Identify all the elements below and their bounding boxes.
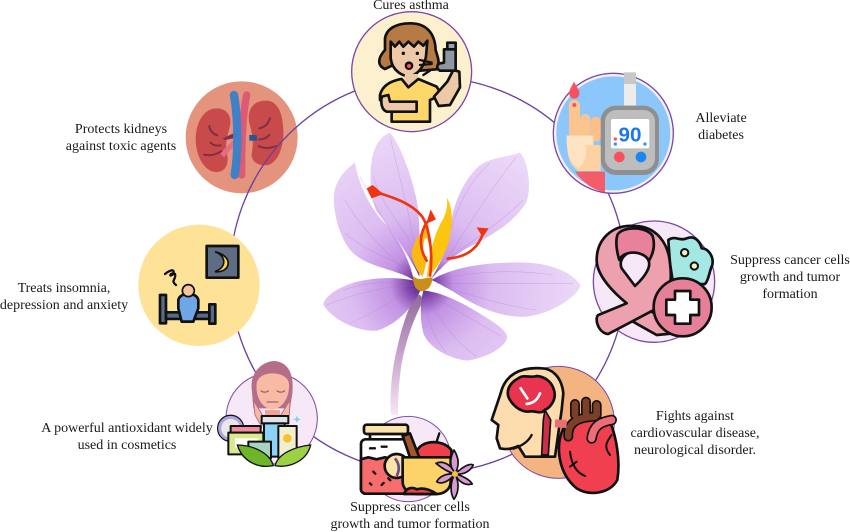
- label: cardiovascular: cardiovascular disease,: [630, 426, 760, 441]
- panel: diabetes icon: [553, 72, 673, 193]
- label: kidneys: Protects kidneys: [75, 122, 167, 137]
- label: alleviate diabetes: diabetes: [698, 128, 744, 143]
- panel: asthma icon: [352, 12, 472, 132]
- label: antioxidant: A powerful antioxidant widely: [41, 421, 213, 436]
- test strip: [624, 72, 636, 84]
- meter: [601, 106, 659, 175]
- jar: [370, 433, 403, 440]
- petal veins: [327, 137, 573, 357]
- panel: saffron food icon: [361, 416, 473, 502]
- label: suppress cancer, right: growth and tumor: [740, 270, 840, 285]
- label: suppress cancer, right: Suppress cancer cells: [730, 253, 850, 268]
- blood drop: [569, 82, 579, 99]
- label: insomnia: Treats insomnia,: [18, 281, 110, 296]
- hand: [569, 100, 580, 142]
- label: cardiovascular: Fights against: [656, 409, 734, 424]
- saffron flower: [436, 450, 473, 499]
- aorta: [568, 402, 597, 437]
- heart: [559, 418, 618, 493]
- label: insomnia: depression and anxiety: [0, 298, 128, 313]
- brain: [508, 376, 555, 412]
- cosmetic jars: [218, 416, 243, 441]
- tumor cell: [668, 237, 713, 285]
- label: suppress cancer, bottom: Suppress cancer cells: [350, 500, 470, 515]
- flower base: [413, 276, 433, 291]
- flower: saffron crocus: [323, 133, 581, 415]
- panel: diabetes icon: 90: [618, 124, 641, 147]
- label: suppress cancer, right: formation: [762, 287, 818, 302]
- medical plus badge: [654, 278, 712, 336]
- petals: [323, 133, 581, 361]
- label: cardiovascular: neurological disorder.: [634, 443, 756, 458]
- head profile: [492, 368, 563, 457]
- panel: insomnia icon: [138, 225, 260, 346]
- leaves: [237, 445, 273, 466]
- stem: [390, 295, 423, 415]
- red stigmas: [372, 191, 483, 277]
- panel: cancer ribbon icon: [593, 221, 715, 342]
- yellow stamens: [412, 223, 429, 277]
- panel: brain and heart icon: [492, 366, 618, 493]
- label: antioxidant: used in cosmetics: [78, 438, 176, 453]
- vessels: [592, 420, 612, 438]
- connecting ring: [230, 77, 626, 473]
- label: alleviate diabetes: Alleviate: [695, 111, 747, 126]
- label: suppress cancer, bottom: growth and tumor formation: [330, 517, 490, 532]
- woman's face: [252, 361, 293, 408]
- label: kidneys: against toxic agents: [66, 139, 176, 154]
- panel: kidneys icon: [186, 81, 298, 193]
- panel: cosmetics icon: [218, 361, 317, 466]
- mortar set: [385, 454, 409, 478]
- ribbon: [630, 307, 675, 335]
